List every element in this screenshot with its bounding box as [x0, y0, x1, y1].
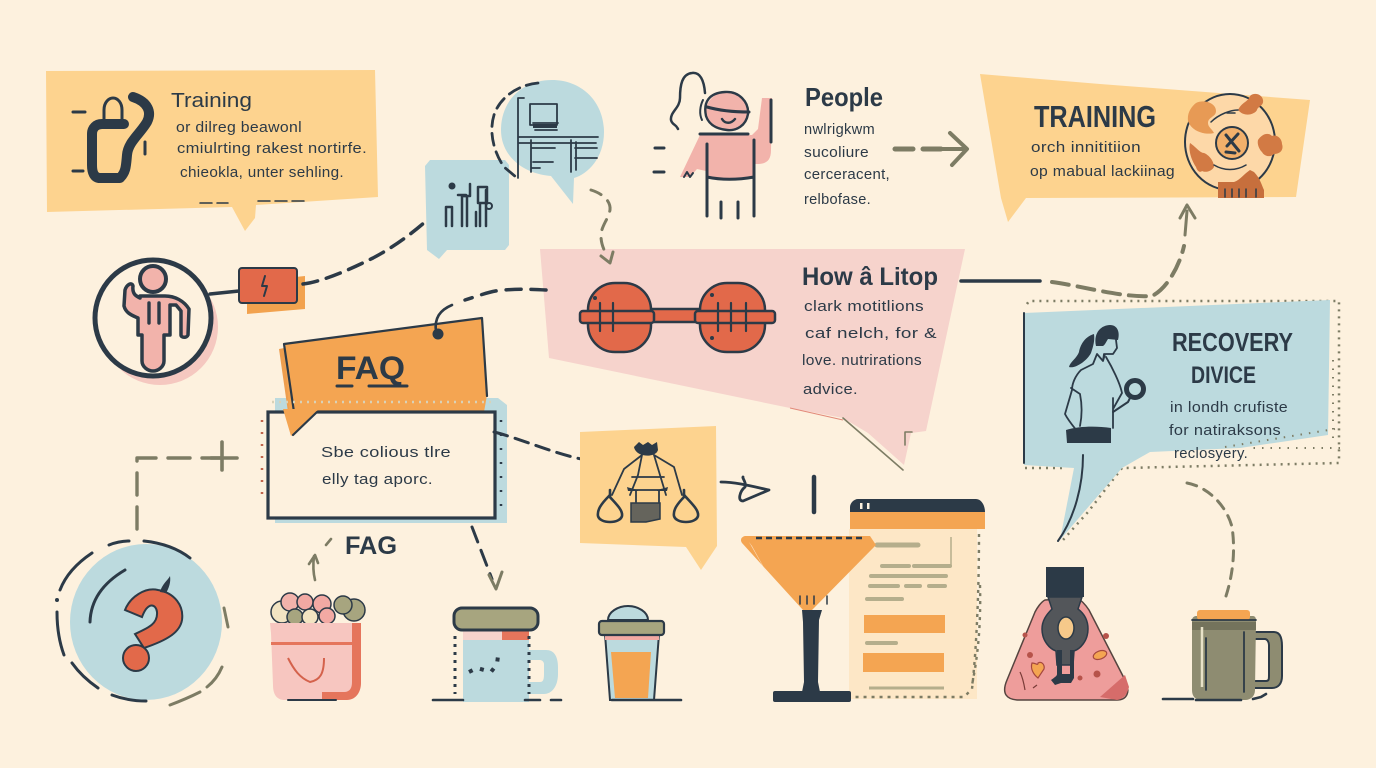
panel: training top right	[980, 74, 1310, 222]
text: people description: nwlrigkwm	[804, 122, 875, 138]
text: faq answer	[321, 445, 451, 488]
heading: faq tag: FAQ	[336, 350, 405, 386]
panel: how a litop	[540, 249, 965, 470]
text: how a litop description: caf nelch, for &	[805, 326, 937, 342]
icon: shaker cup	[599, 606, 681, 700]
text: people description: relbofase.	[804, 192, 871, 208]
icon: red bolt box	[239, 268, 305, 314]
icon: nutrition circle	[1185, 94, 1283, 198]
arrow: question to faq	[137, 442, 237, 529]
icon: olive travel mug	[1163, 610, 1282, 700]
text: training caps description	[1030, 140, 1175, 180]
icon: document page	[849, 499, 985, 699]
text: training description	[176, 120, 367, 181]
text: training caps description: orch innititiion	[1031, 140, 1141, 156]
arrow: dashed arc around computer	[492, 83, 538, 177]
text: recovery description: reclosyery.	[1174, 446, 1248, 462]
text: recovery description: in londh crufiste	[1170, 400, 1288, 416]
heading: training caps: TRAINING	[1034, 99, 1156, 134]
text: how a litop description	[802, 299, 937, 398]
text: how a litop description: clark motitlions	[804, 299, 924, 315]
icon: tools	[446, 182, 492, 226]
icon: computer desk	[518, 98, 598, 178]
text: faq answer: elly tag aporc.	[322, 472, 433, 488]
icon: bodybuilder with weights	[598, 442, 698, 522]
mark: short vertical stroke	[812, 477, 816, 512]
icon: question mark circle	[55, 541, 228, 705]
icon: cocktail glass	[741, 536, 876, 702]
panel: tools bubble	[425, 160, 509, 259]
panel: computer bubble	[501, 80, 604, 204]
arrow: faq to yellow note	[494, 432, 586, 460]
panel: recovery advice	[1024, 300, 1340, 541]
arrow: dumbbell panel to top training	[961, 205, 1195, 296]
icon: dumbbell	[580, 283, 775, 352]
heading: training: Training	[171, 90, 252, 112]
icon: snack bucket	[270, 593, 365, 700]
icon: woman with ponytail	[654, 73, 772, 218]
arrow: dashed link from dumbbell panel to faq tag	[436, 289, 546, 332]
icon: person in circle	[95, 260, 218, 385]
panel: faq	[262, 318, 507, 523]
panel: yellow note	[580, 426, 717, 570]
heading: how a litop: How â Litop	[802, 263, 938, 291]
arrow: dashed link to tools	[303, 222, 425, 284]
text: training caps description: op mabual lackiinag	[1030, 164, 1175, 180]
arrow: bowl to faq	[309, 539, 331, 580]
text: training description: cmiulrting rakest nortirfe.	[177, 141, 367, 157]
text: people description: sucoliure	[804, 145, 869, 161]
text: how a litop description: advice.	[803, 382, 858, 398]
text: people description	[804, 122, 890, 208]
arrow: recovery to flask mug dashed	[1187, 483, 1234, 596]
heading: people: People	[805, 82, 883, 112]
text: recovery description: for natiraksons	[1169, 423, 1281, 439]
icon: pink flask with brush	[1005, 567, 1129, 700]
arrow: dashed to dumbbell	[591, 190, 613, 263]
arrow: people to training	[895, 133, 967, 165]
text: how a litop description: love. nutrirations	[802, 353, 922, 369]
icon: training bottle	[73, 97, 149, 178]
text: faq answer: Sbe colious tlre	[321, 445, 451, 461]
icon: mug with lid	[433, 608, 561, 702]
arrow: faq down to mug	[472, 527, 502, 589]
text: training description: chieokla, unter sehling.	[180, 165, 344, 181]
text: training description: or dilreg beawonl	[176, 120, 302, 136]
heading: recovery: RECOVERY	[1172, 327, 1293, 357]
text: recovery description	[1169, 400, 1288, 462]
panel: training top left	[46, 70, 378, 231]
text: people description: cerceracent,	[804, 167, 890, 183]
icon: woman with weight	[1065, 325, 1144, 443]
heading: divice: DIVICE	[1191, 362, 1256, 389]
heading: fag label: FAG	[345, 532, 397, 560]
connector: person to battery	[210, 291, 239, 294]
arrow: small note arrow	[721, 477, 769, 501]
